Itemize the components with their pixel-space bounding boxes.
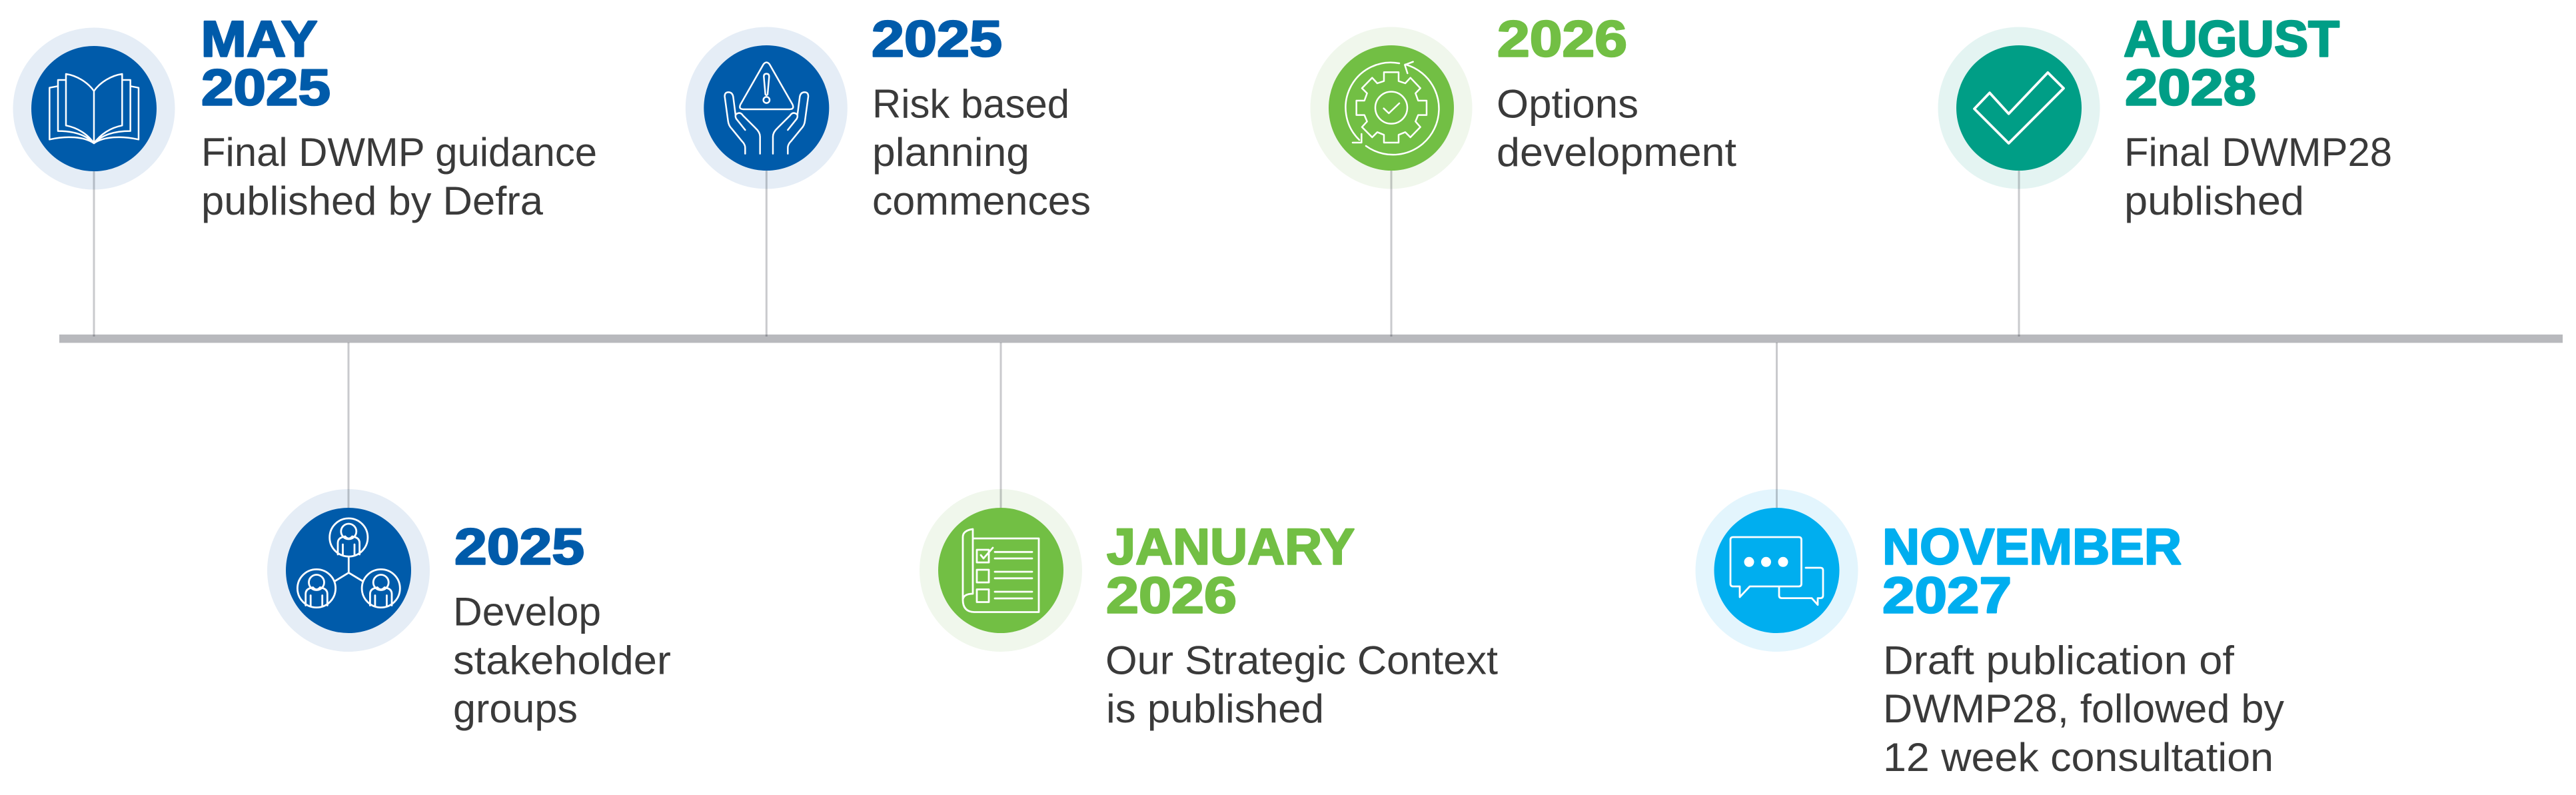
description: stakeholder groups: Develop: [453, 589, 601, 634]
badge disc: options development: [1329, 45, 1454, 171]
description: risk based planning: planning: [872, 130, 1029, 175]
description: options development: development: [1497, 130, 1736, 175]
badge disc: May 2025: [31, 46, 157, 171]
badge disc: January 2026: [938, 508, 1063, 633]
heading: January 2026: 2026: [1106, 568, 1237, 624]
heading: 2025 risk based planning: 2025: [872, 11, 1002, 68]
heading: November 2027: NOVEMBER: [1882, 519, 2182, 576]
connector: stakeholder groups: [348, 343, 349, 512]
milestone: 2025 risk based planning: [686, 11, 1091, 337]
milestone: 2025 stakeholder groups: [267, 343, 671, 731]
description: risk based planning: commences: [872, 179, 1091, 223]
connector: options development: [1390, 167, 1393, 337]
description: November 2027: [1883, 638, 2284, 780]
description: August 2028: Final DWMP28: [2124, 130, 2392, 175]
heading: May 2025: [201, 11, 330, 116]
connector: January 2026: [999, 343, 1002, 512]
milestone: January 2026: [920, 343, 1498, 731]
milestone: May 2025: [13, 11, 597, 337]
badge ring: risk based planning: [686, 27, 848, 189]
heading: January 2026: JANUARY: [1107, 519, 1355, 576]
badge ring: August 2028: [1938, 27, 2100, 189]
description: November 2027: DWMP28, followed by: [1883, 686, 2284, 731]
badge ring: January 2026: [920, 489, 1082, 652]
badge ring: options development: [1310, 27, 1473, 189]
icon: speech bubbles: [1730, 537, 1823, 605]
timeline axis bar: [59, 335, 2563, 343]
milestone: August 2028: [1938, 11, 2392, 337]
heading: January 2026: [1106, 519, 1355, 624]
badge disc: stakeholder groups: [286, 508, 411, 633]
heading: August 2028: 2028: [2125, 60, 2256, 116]
description: options development: [1497, 81, 1736, 175]
milestone: November 2027: [1695, 343, 2284, 780]
heading: 2026 options development: 2026: [1497, 11, 1627, 68]
description: November 2027: 12 week consultation: [1883, 735, 2273, 780]
milestone: 2026 options development: [1310, 11, 1736, 337]
description: stakeholder groups: stakeholder: [453, 638, 671, 682]
description: January 2026: [1105, 638, 1498, 731]
badge ring: May 2025: [13, 28, 175, 189]
connector: August 2028: [2018, 167, 2020, 337]
icon: connected people: [297, 518, 400, 608]
heading: November 2027: 2027: [1882, 568, 2012, 624]
description: stakeholder groups: [453, 589, 671, 731]
description: May 2025: Final DWMP guidance: [201, 130, 597, 175]
badge disc: risk based planning: [704, 45, 829, 171]
badge ring: November 2027: [1695, 489, 1858, 652]
badge ring: stakeholder groups: [267, 489, 430, 652]
description: August 2028: [2124, 130, 2392, 223]
heading: November 2027: [1882, 519, 2182, 624]
description: January 2026: Our Strategic Context: [1105, 638, 1498, 682]
description: May 2025: [201, 130, 597, 223]
icon: check mark outline: [1974, 73, 2064, 143]
connector: risk based planning: [766, 167, 768, 337]
description: November 2027: Draft publication of: [1883, 638, 2234, 682]
icon: gear with cycle arrows: [1345, 62, 1439, 155]
heading: August 2028: AUGUST: [2124, 11, 2339, 68]
description: May 2025: published by Defra: [201, 179, 544, 223]
icon: hands holding warning triangle: [725, 63, 808, 154]
icon: open book: [49, 74, 139, 143]
description: risk based planning: [872, 81, 1091, 223]
heading: May 2025: 2025: [201, 60, 330, 116]
description: August 2028: published: [2124, 179, 2304, 223]
connector: May 2025: [93, 167, 95, 337]
badge disc: November 2027: [1714, 508, 1839, 633]
description: options development: Options: [1497, 81, 1638, 127]
description: risk based planning: Risk based: [872, 81, 1069, 127]
badge disc: August 2028: [1956, 45, 2082, 171]
description: stakeholder groups: groups: [453, 686, 578, 731]
description: January 2026: is published: [1106, 686, 1324, 731]
heading: 2025 stakeholder groups: 2025: [454, 519, 584, 576]
icon: checklist scroll: [963, 529, 1039, 612]
connector: November 2027: [1776, 343, 1778, 512]
heading: August 2028: [2124, 11, 2339, 116]
heading: May 2025: MAY: [201, 11, 317, 68]
